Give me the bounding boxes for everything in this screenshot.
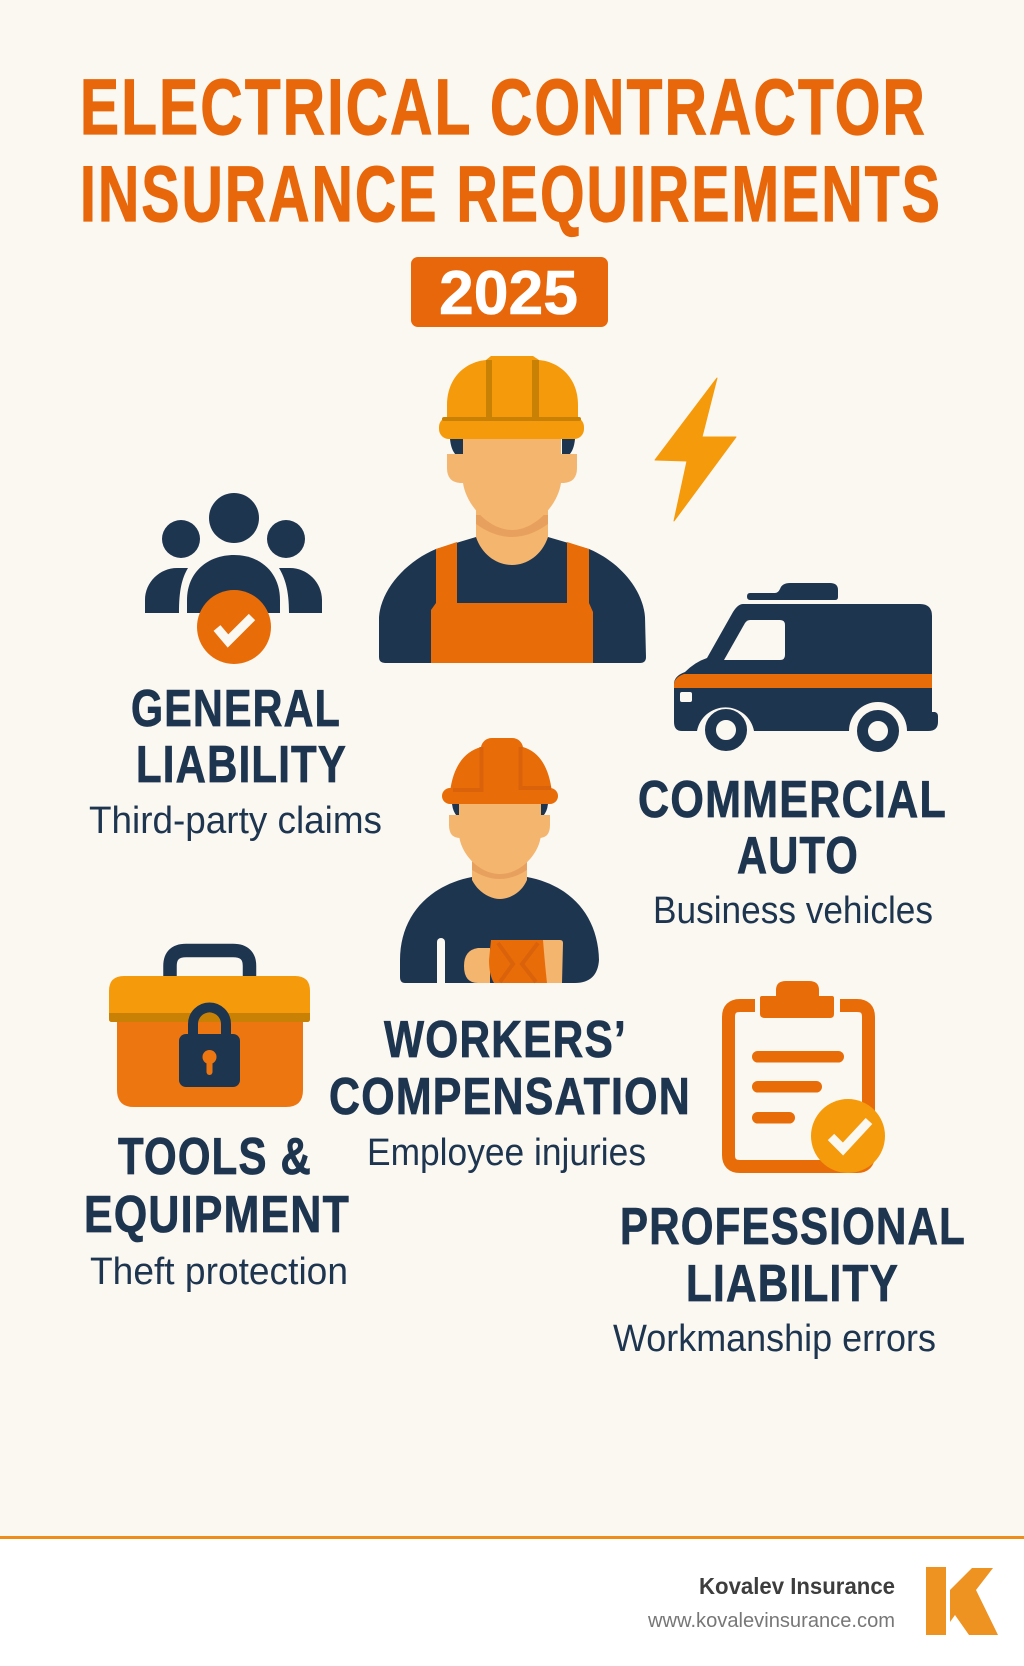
panel: commercial auto bbox=[638, 583, 947, 932]
text: third-party claims: Third-party claims bbox=[89, 800, 382, 842]
text: business vehicles: Business vehicles bbox=[653, 890, 933, 932]
text: company name: Kovalev Insurance bbox=[699, 1573, 895, 1599]
year badge: 2025 bbox=[439, 259, 578, 328]
panel: professional liability bbox=[613, 981, 966, 1360]
footer brand bbox=[647, 1567, 998, 1635]
panel: workers' compensation bbox=[329, 738, 691, 1174]
icon: clipboard with check bbox=[728, 981, 885, 1173]
illustration: injured worker bbox=[400, 738, 599, 983]
heading: general liability: GENERAL bbox=[131, 680, 341, 738]
heading: general liability bbox=[131, 680, 347, 794]
icon: van bbox=[674, 583, 938, 746]
heading: professional liability: LIABILITY bbox=[686, 1255, 899, 1313]
heading: commercial auto: AUTO bbox=[737, 827, 859, 885]
heading: commercial auto: COMMERCIAL bbox=[638, 771, 947, 829]
heading: workers' compensation bbox=[329, 1011, 691, 1126]
heading: general liability: LIABILITY bbox=[136, 736, 347, 794]
panel: tools and equipment bbox=[84, 950, 350, 1293]
panel: general liability bbox=[89, 493, 382, 842]
heading: workers' compensation: WORKERS’ bbox=[384, 1011, 627, 1069]
icon: locked toolbox bbox=[109, 950, 310, 1107]
text: website: www.kovalevinsurance.com bbox=[647, 1609, 895, 1632]
icon: people with check bbox=[145, 493, 322, 664]
text: theft protection: Theft protection bbox=[90, 1251, 348, 1293]
heading: tools and equipment: EQUIPMENT bbox=[84, 1186, 350, 1244]
icon: lightning bolt bbox=[655, 378, 736, 521]
illustration: electrician in apron bbox=[379, 356, 646, 663]
heading: tools and equipment bbox=[84, 1128, 350, 1244]
text: employee injuries: Employee injuries bbox=[367, 1132, 646, 1174]
heading: professional liability bbox=[620, 1198, 966, 1313]
heading: workers' compensation: COMPENSATION bbox=[329, 1068, 691, 1126]
year badge bbox=[411, 257, 608, 328]
icon: K logo bbox=[926, 1567, 998, 1635]
heading: tools and equipment: TOOLS & bbox=[118, 1128, 312, 1186]
heading: commercial auto bbox=[638, 771, 947, 885]
text: workmanship errors: Workmanship errors bbox=[613, 1318, 936, 1360]
title bbox=[80, 62, 942, 238]
